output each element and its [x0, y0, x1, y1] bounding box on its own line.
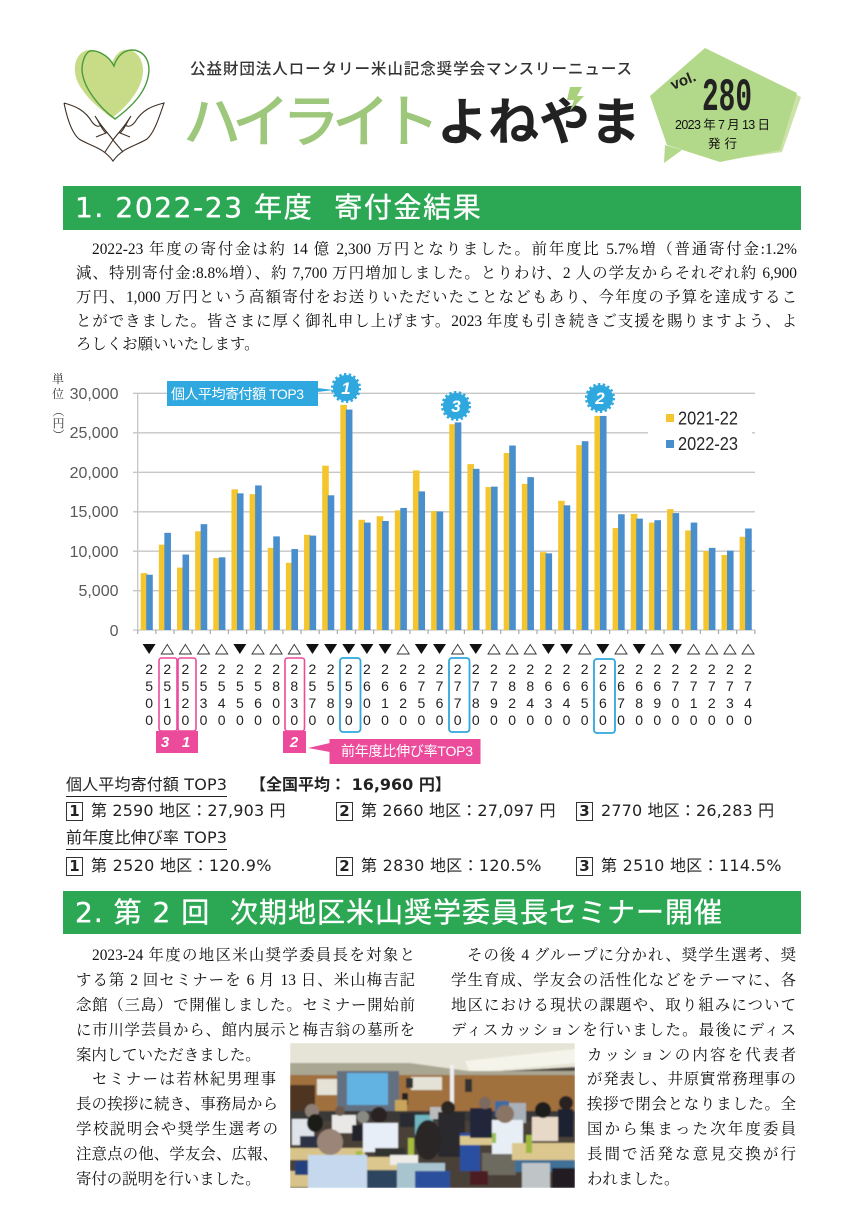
unit label: 位 [52, 386, 64, 401]
callout: top 3 by average donation [167, 381, 334, 406]
legend [666, 408, 738, 454]
unit label: （円） [51, 405, 65, 441]
district labels: 2770 [454, 660, 462, 728]
district labels: 2560 [254, 660, 262, 728]
title: black part: よねやま [437, 94, 641, 151]
district labels: 2670 [617, 660, 625, 728]
y axis labels: 5,000 [78, 583, 119, 600]
section 2 right column: カッションの内容を代表者 [587, 1047, 796, 1064]
district labels: 2740 [744, 660, 752, 728]
section 2 right column: その後 4 グループに分かれ、奨学生選考、奨 [467, 947, 796, 964]
district labels: 2640 [563, 660, 570, 728]
district labels: 2610 [381, 660, 389, 728]
district labels: 2800 [272, 660, 280, 728]
section 1 body text: 減、特別寄付金:8.8%増）、約 7,700 万円増加しました。とりわけ、2 人の学友からそれぞれ約 6,900 [76, 265, 797, 282]
ranking: growth rate [66, 828, 782, 876]
section 2 left column: 学校説明会や奨学生選考の [76, 1121, 278, 1138]
icon: heart outline [82, 50, 149, 119]
legend: 2021-22 [678, 408, 738, 428]
badge: rank 3 [442, 392, 470, 420]
subtitle: 公益財団法人ロータリー米山記念奨学会マンスリーニュース [190, 61, 632, 78]
district labels: 2660 [599, 660, 607, 728]
badge: rank 3: 3 [451, 397, 461, 416]
section 2 left column: 2023-24 年度の地区米山奨学委員長を対象と [92, 947, 415, 964]
callout: top 3 by average donation: 個人平均寄付額 TOP3 [171, 386, 304, 402]
callout: top 3 growth [308, 739, 480, 764]
ranking: average donation: 2770 地区：26,283 円 [601, 801, 774, 820]
section 2 left column: セミナーは若林紀男理事 [92, 1071, 276, 1088]
badge: volume number [650, 48, 801, 163]
title: green part: ハイライト [183, 90, 432, 155]
district labels: 2600 [363, 660, 371, 728]
district labels [145, 660, 752, 728]
legend: 2022-23 [678, 434, 738, 454]
district labels: 2620 [399, 660, 407, 728]
pink rank tags: 1 [182, 734, 190, 751]
district labels: 2590 [345, 660, 353, 728]
y axis labels: 25,000 [70, 425, 119, 442]
icon: hands [64, 103, 164, 161]
section 1 body text [76, 240, 797, 353]
district labels: 2540 [218, 660, 226, 728]
badge shape [650, 48, 801, 163]
pink rank tags [156, 731, 306, 753]
vol label: vol. [668, 68, 698, 94]
y axis labels: 0 [110, 623, 119, 640]
section 2 left column: に市川学芸員から、館内展示と梅吉翁の墓所を [76, 1022, 415, 1039]
district labels: 2580 [327, 660, 334, 728]
district labels: 2830 [290, 660, 298, 728]
district labels: 2630 [544, 660, 552, 728]
photo: seminar room [290, 1043, 575, 1188]
y axis labels: 20,000 [70, 465, 119, 482]
pink frames [159, 658, 304, 731]
section 1 body text: ろしくお願いいたします。 [76, 336, 259, 353]
section 2 left column: 寄付の説明を行いました。 [76, 1171, 261, 1188]
district labels: 2820 [508, 660, 516, 728]
section 1 body text: 万円、1,000 万円という高額寄付をお送りいただいたことなどもあり、今年度の予算を達成するこ [76, 289, 797, 306]
icon: lightning accent [567, 87, 584, 111]
ranking: growth rate: 第 2510 地区：114.5% [601, 856, 782, 875]
district labels: 2840 [526, 660, 534, 728]
badge: rank 1 [332, 374, 360, 402]
district labels: 2760 [436, 660, 443, 728]
district labels: 2690 [653, 660, 661, 728]
section 2 left column: 念館（三島）で開催しました。セミナー開始前 [76, 997, 415, 1014]
section 2 right column: 長間で活発な意見交換が行 [587, 1146, 796, 1163]
ranking: average donation: 3 [579, 802, 590, 820]
unit label: 単 [52, 372, 64, 386]
y axis labels [70, 386, 119, 640]
icon: light green heart [75, 50, 143, 118]
blue frames [340, 658, 615, 733]
ranking: growth rate: 1 [69, 857, 80, 875]
unit label [51, 372, 65, 441]
ranking heading: 前年度比伸び率 TOP3 [66, 828, 227, 847]
national average: 【全国平均： 16,960 円】 [250, 775, 451, 794]
ranking: growth rate: 2 [339, 857, 350, 875]
section 2 heading: 2. 第 2 回 次期地区米山奨学委員長セミナー開催 [75, 896, 723, 929]
section 2 left column [76, 946, 415, 1188]
ranking: average donation [66, 775, 774, 821]
issued label: 発 行 [708, 137, 737, 151]
district labels: 2700 [672, 660, 679, 728]
district labels: 2750 [417, 660, 425, 728]
section 2 right column: が発表し、井原實常務理事の [587, 1071, 796, 1088]
y axis labels: 10,000 [70, 544, 119, 561]
ranking: average donation: 1 [69, 802, 80, 820]
district labels: 2500 [145, 660, 153, 728]
district labels: 2510 [163, 660, 171, 728]
logo: heart and hands [64, 49, 165, 162]
y axis labels: 30,000 [70, 386, 119, 403]
district labels: 2650 [581, 660, 589, 728]
issue date: 2023 年 7 月 13 日 [675, 118, 770, 132]
district labels: 2550 [236, 660, 244, 728]
section 2 right column: 挨拶で閉会となりました。全 [587, 1096, 796, 1113]
section 2 left column: 注意点の他、学友会、広報、 [76, 1146, 278, 1163]
highlight frames and growth callout [156, 657, 616, 764]
district labels: 2570 [309, 660, 316, 728]
section 2 heading [63, 891, 801, 934]
section 1 body text: 2022-23 年度の寄付金は約 14 億 2,300 万円となりました。前年度比 5.7%増（普通寄付金:1.2% [92, 241, 797, 258]
district labels: 2520 [181, 660, 189, 728]
y axis labels: 15,000 [70, 504, 119, 521]
ranking: growth rate: 3 [579, 857, 590, 875]
district labels: 2720 [708, 660, 716, 728]
callout: top 3 growth: 前年度比伸び率TOP3 [341, 743, 473, 759]
ranking: average donation: 2 [339, 802, 350, 820]
district labels: 2680 [635, 660, 643, 728]
section 2 right column: 国から集まった次年度委員 [587, 1121, 796, 1138]
section 2 right column: われました。 [587, 1171, 679, 1188]
district labels: 2790 [490, 660, 498, 728]
district labels: 2710 [690, 660, 697, 728]
district labels: 2530 [200, 660, 207, 728]
ranking: growth rate: 第 2830 地区：120.5% [361, 856, 542, 875]
ranking heading: 個人平均寄付額 TOP3 [66, 775, 227, 794]
grid lines [133, 393, 756, 632]
section 1 heading: 1. 2022-23 年度 寄付金結果 [75, 191, 482, 224]
section 2 right column: 学生育成、学友会の活性化などをテーマに、各 [451, 972, 796, 989]
section 2 left column: する第 2 回セミナーを 6 月 13 日、米山梅吉記 [76, 972, 415, 989]
change markers: triangles [142, 644, 755, 654]
section 2 left column: 案内していただきました。 [76, 1047, 261, 1064]
section 2 right column: 地区における現状の課題や、取り組みについて [451, 997, 796, 1014]
pink rank tags: 3 [161, 734, 170, 751]
badge: rank 2 [586, 384, 614, 412]
badge: rank 1: 1 [341, 379, 351, 398]
badge: rank 2: 2 [594, 389, 605, 408]
section 2 right column [451, 946, 796, 1188]
ranking: average donation: 第 2660 地区：27,097 円 [361, 801, 556, 820]
district labels: 2730 [726, 660, 734, 728]
section 1 heading [63, 186, 801, 230]
section 2 right column: ディスカッションを行いました。最後にディス [451, 1022, 796, 1039]
section 2 left column: 長の挨拶に続き、事務局から [76, 1096, 278, 1113]
volume number: 280 [702, 72, 752, 124]
section 1 body text: とができました。皆さまに厚く御礼申し上げます。2023 年度も引き続きご支援を賜りますよう、よ [76, 313, 797, 330]
ranking: growth rate: 第 2520 地区：120.9% [91, 856, 272, 875]
pink rank tags: 2 [289, 734, 299, 751]
ranking: average donation: 第 2590 地区：27,903 円 [91, 801, 286, 820]
district labels: 2780 [472, 660, 480, 728]
bar chart: donation per person by district [51, 372, 756, 640]
